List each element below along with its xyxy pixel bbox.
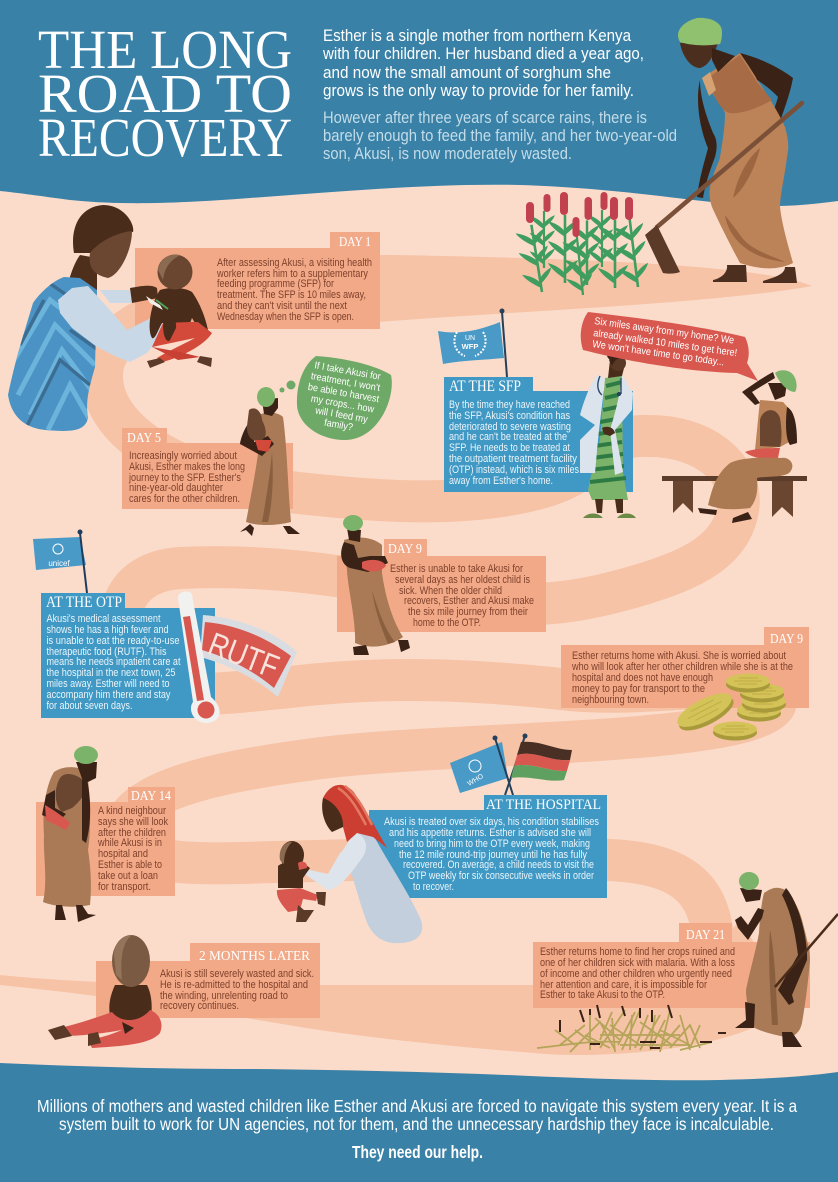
panel: at the OTP <box>41 593 215 718</box>
panel: Day 9 (home): hospital and does not have enough <box>572 672 713 684</box>
panel: Day 14: hospital and <box>98 848 148 860</box>
intro text: grows is the only way to provide for her family. <box>323 82 634 100</box>
panel: Day 1 <box>135 232 380 329</box>
panel: Day 1: After assessing Akusi, a visiting health <box>217 257 372 269</box>
panel: 2 months later: 2 MONTHS LATER <box>199 949 311 964</box>
figure: Esther with neighbour's help <box>42 746 98 922</box>
panel: Day 14: for transport. <box>98 881 151 893</box>
panel: Day 1: feeding programme (SFP) for <box>217 278 334 290</box>
thermometer <box>178 592 220 723</box>
figure: Esther with stick <box>735 872 838 1047</box>
figure: doctor <box>580 350 636 518</box>
figure: hospital worker with Akusi <box>277 785 422 943</box>
ruined crops <box>537 1005 726 1052</box>
panel: Day 1: treatment. The SFP is 10 miles away, <box>217 289 366 301</box>
panel: Day 9 (to the OTP): sick. When the older child <box>399 585 502 597</box>
RUTF packet: RUTF <box>203 625 284 685</box>
intro text: However after three years of scarce rains, there is <box>323 109 647 127</box>
panel: at the OTP: miles away. Esther will need to <box>46 678 170 690</box>
title <box>38 19 292 168</box>
panel: Day 9 (home): DAY 9 <box>770 632 803 647</box>
panel: Day 5 <box>122 428 293 509</box>
panel: at the hospital: Akusi is treated over six days, his condition stabilises <box>384 816 599 828</box>
panel: Day 9 (to the OTP): recovers, Esther and Akusi make <box>404 595 534 607</box>
panel: Day 21: her attention and care, it is impossible for <box>540 979 707 991</box>
panel: at the OTP: shows he has a high fever and <box>46 624 168 636</box>
panel: Day 9 (home): money to pay for transport to the <box>572 683 705 695</box>
flag: WFP: UN <box>465 335 475 342</box>
footer text: They need our help. <box>352 1142 483 1162</box>
panel: Day 14 <box>36 787 175 896</box>
intro text: and now the small amount of sorghum she <box>323 64 611 82</box>
figure: health worker with Akusi <box>8 205 212 431</box>
panel: Day 14: Esther is able to <box>98 859 162 871</box>
panel: at the hospital: recovered. On average, a child needs to visit the <box>403 859 594 871</box>
panel: Day 9 (home): Esther returns home with Akusi. She is worried about <box>572 650 786 662</box>
panel: at the SFP: and he can't be treated at the <box>449 431 567 443</box>
panel: Day 9 (to the OTP): Esther is unable to take Akusi for <box>390 563 523 575</box>
panel: Day 14: after the children <box>98 827 166 839</box>
panel: Day 5: journey to the SFP. Esther's <box>128 472 241 484</box>
panel: at the hospital: the 12 mile round-trip journey until he has fully <box>399 849 587 861</box>
panel: at the SFP: SFP. He needs to be treated at <box>449 442 570 454</box>
panel: Day 14: says she will look <box>98 816 168 828</box>
panel: Day 5: Akusi, Esther makes the long <box>129 461 245 473</box>
speech bubble: Esther's thought: my crops... how <box>310 394 376 416</box>
speech bubble: Esther's thought: treatment, I won't <box>310 371 381 394</box>
panel: Day 21: one of her children sick with malaria. With a loss <box>540 957 735 969</box>
panel: Day 5: Increasingly worried about <box>129 450 237 462</box>
panel: Day 5: nine-year-old daughter <box>129 482 223 494</box>
panel: at the SFP <box>444 377 633 492</box>
panel: 2 months later: Akusi is still severely wasted and sick. <box>160 968 314 980</box>
panel: Day 9 (home): who will look after her other children while she is at the <box>571 661 793 673</box>
panel: at the hospital: OTP weekly for six consecutive weeks in order <box>408 870 594 882</box>
speech bubble: Esther's thought <box>280 356 392 440</box>
intro text: with four children. Her husband died a year ago, <box>322 45 644 63</box>
panel: at the OTP: means he needs inpatient care at <box>46 656 180 668</box>
panel: at the SFP: deteriorated to severe wasting <box>449 421 571 433</box>
panel: Day 9 (to the OTP): the six mile journey from their <box>408 606 528 618</box>
flag: WFP: WFP <box>462 342 478 351</box>
panel: Day 14: while Akusi is in <box>97 837 162 849</box>
panel: Day 1: DAY 1 <box>339 235 371 250</box>
panel: at the OTP: is unable to eat the ready-to-use <box>46 635 180 647</box>
panel: at the SFP: AT THE SFP <box>449 378 521 395</box>
figure: Esther walking with Akusi <box>240 387 300 536</box>
panel: at the hospital <box>369 795 607 898</box>
panel: at the hospital: need to bring him to the OTP every week, making <box>394 838 590 850</box>
intro text: son, Akusi, is now moderately wasted. <box>323 145 572 163</box>
figure: Akusi sitting <box>48 935 161 1048</box>
title: RECOVERY <box>38 107 292 168</box>
panel: Day 1: Wednesday when the SFP is open. <box>217 311 354 323</box>
winding road <box>0 255 812 1055</box>
panel: at the OTP: for about seven days. <box>46 700 132 712</box>
panel: Day 21: of income and other children who urgently need <box>540 968 732 980</box>
speech bubble: Esther at the SFP <box>581 312 758 381</box>
figure: Esther hoeing <box>645 18 802 283</box>
panel: at the SFP: the SFP, Akusi's condition has <box>449 410 570 422</box>
panel: Day 9 (to the OTP): home to the OTP. <box>413 617 481 629</box>
panel: Day 21: Esther returns home to find her crops ruined and <box>540 946 735 958</box>
panel: Day 9 (to the OTP): DAY 9 <box>388 542 422 557</box>
panel: Day 21 <box>533 923 810 1008</box>
panel: at the OTP: Akusi's medical assessment <box>46 613 160 625</box>
panel: at the SFP: (OTP) instead, which is six miles <box>449 464 579 476</box>
coins <box>673 674 786 740</box>
title: ROAD TO <box>38 63 292 124</box>
intro text: barely enough to feed the family, and her two-year-old <box>323 127 677 145</box>
speech bubble: Esther's thought: family? <box>323 418 354 434</box>
panel: Day 9 (to the OTP) <box>337 539 546 632</box>
flag: UNICEF <box>33 530 87 593</box>
panel: Day 21: Esther to take Akusi to the OTP. <box>540 989 665 1001</box>
footer text <box>37 1096 797 1162</box>
panel: at the hospital: and his appetite returns. Esther is advised she will <box>389 827 591 839</box>
panel: Day 14: take out a loan <box>98 870 158 882</box>
panel: at the SFP: away from Esther's home. <box>449 475 553 487</box>
panel: at the OTP: the hospital in the next town, 25 <box>46 667 176 679</box>
panel: 2 months later: the winding, unrelenting road to <box>160 990 288 1002</box>
panel: Day 21: DAY 21 <box>686 928 725 943</box>
panel: Day 14: A kind neighbour <box>98 805 166 817</box>
panel: at the OTP: therapeutic food (RUTF). This <box>46 646 167 658</box>
panel: Day 5: DAY 5 <box>127 431 161 446</box>
panel: at the hospital: to recover. <box>413 881 454 893</box>
panel: at the SFP: By the time they have reached <box>449 399 570 411</box>
panel: Day 14: DAY 14 <box>131 789 171 804</box>
speech bubble: Esther at the SFP: already walked 10 miles to get here! <box>593 328 738 359</box>
speech bubble: Esther's thought: be able to harvest <box>307 382 380 405</box>
panel: 2 months later: He is re-admitted to the hospital and <box>160 979 308 991</box>
title: THE LONG <box>38 19 292 80</box>
flags: WHO and Kenya <box>450 734 572 795</box>
flags: WHO and Kenya: WHO <box>466 773 485 788</box>
panel: at the SFP: the outpatient treatment facility <box>449 453 577 465</box>
speech bubble: Esther at the SFP: We won't have time to go today... <box>592 339 725 368</box>
panel: at the OTP: accompany him there and stay <box>46 689 171 701</box>
panel: 2 months later <box>96 943 320 1018</box>
sorghum plants <box>515 192 651 297</box>
footer: blue band <box>0 1063 838 1182</box>
figure: Esther walking to the OTP <box>341 515 410 655</box>
panel: Day 9 (home) <box>561 627 809 708</box>
panel: at the hospital: AT THE HOSPITAL <box>486 797 601 813</box>
panel: Day 1: worker refers him to a supplementary <box>216 268 368 280</box>
figure: Esther seated on bench with Akusi <box>662 370 807 523</box>
panel: Day 9 (home): neighbouring town. <box>572 694 649 706</box>
panel: Day 9 (to the OTP): several days as her oldest child is <box>395 574 530 586</box>
speech bubble: Esther's thought: If I take Akusi for <box>313 360 382 383</box>
speech bubble: Esther's thought: will I feed my <box>313 405 368 426</box>
flag: UNICEF: unicef <box>48 559 70 568</box>
speech bubble: Esther at the SFP: Six miles away from my home? We <box>594 316 735 347</box>
intro text: Esther is a single mother from northern Kenya <box>323 27 632 45</box>
flag: WFP <box>438 308 507 377</box>
panel: Day 5: cares for the other children. <box>129 493 240 505</box>
panel: 2 months later: recovery continues. <box>160 1000 239 1012</box>
header: blue sky band <box>0 0 838 206</box>
panel: Day 1: and they can't visit until the next <box>217 300 347 312</box>
intro text <box>322 27 677 163</box>
panel: at the OTP: AT THE OTP <box>46 594 122 611</box>
